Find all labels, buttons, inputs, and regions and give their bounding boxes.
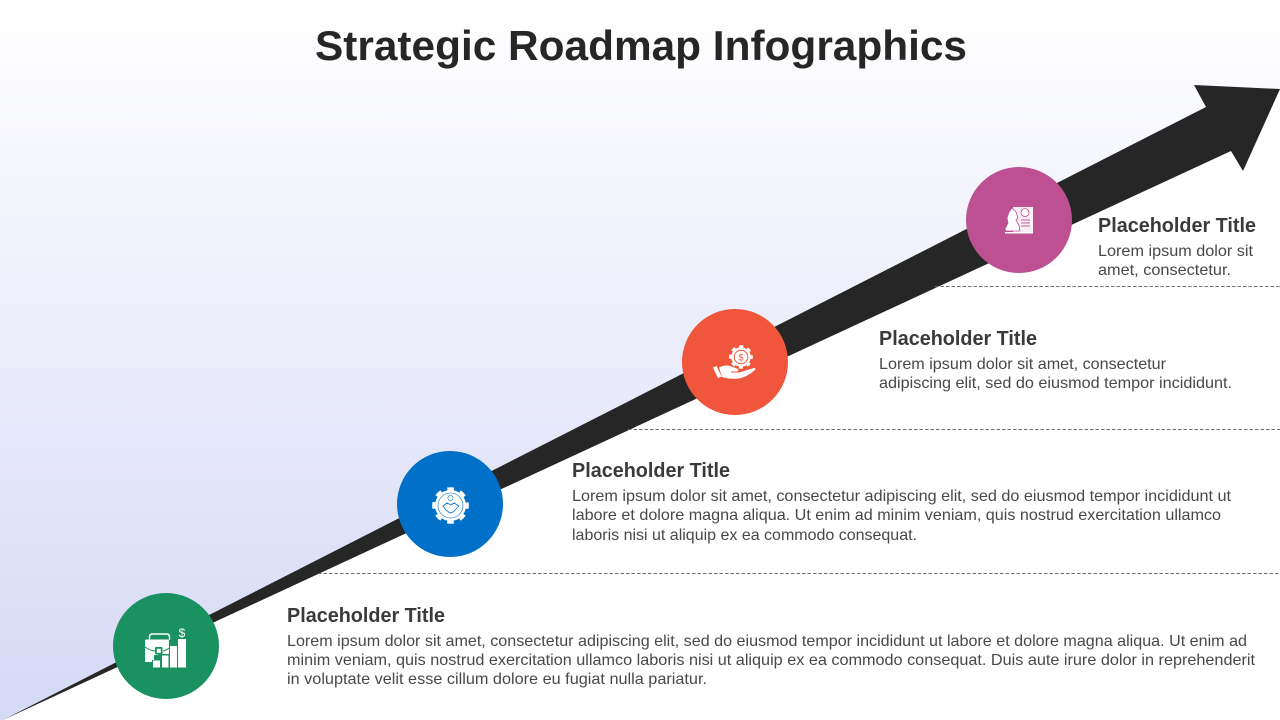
step 1 marker: green circle with briefcase icon bbox=[113, 593, 219, 699]
text block: step 1: minim veniam, quis nostrud exercitation ullamco laboris nisi ut aliquip ex ea commodo consequat. Duis aute irure dolor in reprehenderit bbox=[287, 652, 1256, 669]
title: Strategic Roadmap Infographics bbox=[315, 22, 967, 69]
text block: step 3 bbox=[879, 328, 1232, 392]
text block: step 3: adipiscing elit, sed do eiusmod tempor incididunt. bbox=[879, 375, 1232, 392]
text block: step 1: in voluptate velit esse cillum dolore eu fugiat nulla pariatur. bbox=[287, 671, 707, 688]
text block: step 2 bbox=[572, 460, 1232, 544]
text block: step 2: labore et dolore magna aliqua. Ut enim ad minim veniam, quis nostrud exercitation ullamco bbox=[572, 507, 1221, 524]
text block: step 4: amet, consectetur. bbox=[1098, 262, 1231, 279]
text block: step 4 bbox=[1098, 215, 1256, 279]
text block: step 2: Placeholder Title bbox=[572, 460, 730, 482]
icon: gear with handshake bbox=[434, 489, 467, 522]
icon: hand holding gear coin: $ bbox=[738, 352, 744, 362]
text block: step 1: Placeholder Title bbox=[287, 605, 445, 627]
text block: step 1 bbox=[287, 605, 1256, 688]
text block: step 2: Lorem ipsum dolor sit amet, consectetur adipiscing elit, sed do eiusmod tempor incididunt ut bbox=[572, 488, 1232, 505]
text block: step 3: Lorem ipsum dolor sit amet, consectetur bbox=[879, 356, 1167, 373]
icon: document with chess knight bbox=[1005, 207, 1033, 234]
text block: step 4: Lorem ipsum dolor sit bbox=[1098, 243, 1254, 260]
text block: step 2: laboris nisi ut aliquip ex ea commodo consequat. bbox=[572, 527, 917, 544]
step 4 marker: pink circle with document icon bbox=[966, 167, 1072, 273]
step 3 marker: orange circle with hand and gear icon bbox=[682, 309, 788, 415]
icon: briefcase and growth bars: $ bbox=[179, 626, 186, 640]
text block: step 1: Lorem ipsum dolor sit amet, consectetur adipiscing elit, sed do eiusmod tempor incididunt ut labore et dolore magna aliqua. Ut enim ad bbox=[287, 633, 1247, 650]
text block: step 3: Placeholder Title bbox=[879, 328, 1037, 350]
text block: step 4: Placeholder Title bbox=[1098, 215, 1256, 237]
step 2 marker: blue circle with gear handshake icon bbox=[397, 451, 503, 557]
